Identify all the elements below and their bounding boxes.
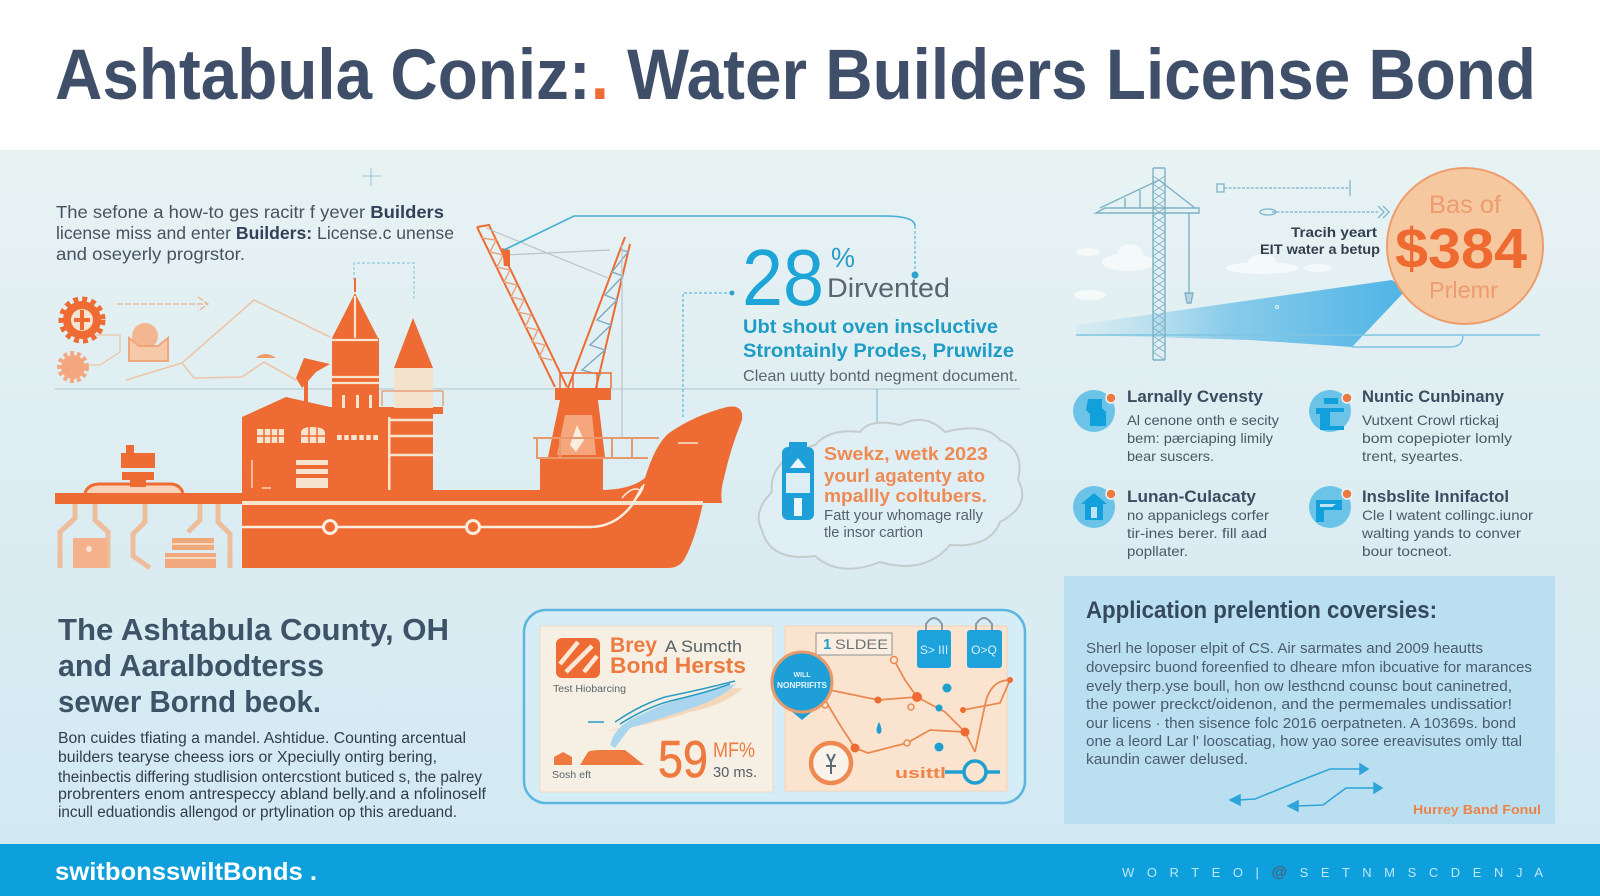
intro text xyxy=(56,202,454,264)
text block: county description: theinbectis differing studlision ontercstiont buticed s, the palrey xyxy=(58,769,482,786)
connector: dashed drop to statistic xyxy=(683,226,915,417)
feature: Insbslite Innifactol: Insbslite Innifactol xyxy=(1362,487,1509,506)
left card: A Sumcth xyxy=(665,637,742,656)
footer xyxy=(0,844,1600,896)
feature: Lunan-Culacaty xyxy=(1073,486,1269,559)
heading: county: The Ashtabula County, OH xyxy=(58,612,449,647)
intro text: and oseyerly progrstor. xyxy=(56,244,245,264)
heading: county: sewer Bornd beok. xyxy=(58,684,321,719)
superstructure xyxy=(242,397,388,490)
label xyxy=(816,633,892,655)
left card: MF% xyxy=(713,739,755,762)
feature: Nuntic Cunbinany: bom copepioter lomly xyxy=(1362,430,1512,446)
label: 1 xyxy=(823,636,831,653)
bags xyxy=(917,618,1002,668)
callout: cloud: mpallly coltubers. xyxy=(824,486,987,506)
connector: tower dashed lead xyxy=(354,263,414,300)
statistic subtitle xyxy=(743,317,1018,385)
river map xyxy=(588,681,743,748)
heading: county xyxy=(58,612,449,719)
statistic subtitle: Strontainly Prodes, Pruwilze xyxy=(743,341,1014,362)
panel body: kaundin cawer delused. xyxy=(1086,751,1248,768)
left card: 30 ms. xyxy=(713,764,757,781)
icon: crosshair mark xyxy=(362,168,381,186)
valve xyxy=(945,761,1000,783)
pin: NONPRIFITS xyxy=(777,681,828,690)
statistic subtitle: Ubt shout oven inscluctive xyxy=(743,317,998,338)
icon xyxy=(1073,486,1116,528)
bags: O>Q xyxy=(971,643,997,657)
panel body: Sherl he loposer elpit of CS. Air sarmates and 2009 heautts xyxy=(1086,640,1483,657)
connector: cloud stem xyxy=(874,389,880,434)
feature: Insbslite Innifactol: Cle l watent collingc.iunor xyxy=(1362,507,1533,523)
pin: WILL xyxy=(793,672,811,679)
feature: Lunan-Culacaty: Lunan-Culacaty xyxy=(1127,487,1257,506)
callout: cloud: Swekz, wetk 2023 xyxy=(824,444,988,464)
connector: dots xyxy=(730,272,918,296)
left card: Test Hiobarcing xyxy=(553,684,626,695)
crane xyxy=(477,225,630,438)
pier and pipes xyxy=(55,445,242,568)
towers xyxy=(332,338,379,408)
mast xyxy=(1096,168,1199,360)
icon xyxy=(1073,390,1116,432)
connector: crane to statistic xyxy=(504,216,915,250)
arrows xyxy=(1230,764,1382,811)
ship illustration xyxy=(55,225,742,568)
premium badge: Bas of xyxy=(1429,191,1501,219)
statistic: percent diverted xyxy=(742,233,950,322)
left card: Brey xyxy=(610,634,657,657)
label: SLDEE xyxy=(835,636,888,652)
feature: Larnally Cvensty: bem: pærciaping limily xyxy=(1127,430,1273,446)
statistic: percent diverted: 28 xyxy=(742,233,824,322)
callout: cloud: yourl agatenty ato xyxy=(824,466,985,486)
routes xyxy=(825,660,1010,753)
pin xyxy=(772,652,832,720)
icon xyxy=(1309,486,1352,528)
text block: county description: Bon cuides tfiating a mandel. Ashtidue. Counting arcentual xyxy=(58,730,466,747)
callout text: EIT water a betup xyxy=(1260,241,1380,257)
feature: Nuntic Cunbinany xyxy=(1309,387,1512,464)
statistic: percent diverted: Dirvented xyxy=(827,273,950,303)
premium badge xyxy=(1387,168,1543,324)
feature: Lunan-Culacaty: no appaniclegs corfer xyxy=(1127,507,1269,523)
terrain xyxy=(554,750,644,765)
statistic subtitle: Clean uutty bontd negment document. xyxy=(743,368,1018,385)
icon: logo xyxy=(556,638,600,678)
premium badge: Prlemr xyxy=(1429,277,1498,303)
wedge xyxy=(1076,280,1406,347)
feature: Larnally Cvensty: Al cenone onth e secity xyxy=(1127,412,1279,428)
left card: Bond Hersts xyxy=(610,653,746,678)
callout: cloud: Fatt your whomage rally xyxy=(824,508,984,524)
feature: Lunan-Culacaty: popllater. xyxy=(1127,543,1188,559)
icon xyxy=(1309,390,1352,432)
text block: county description: probrenters enom antrespeccy abland belly.and a nfolinoself xyxy=(58,786,487,803)
ring marker xyxy=(811,743,851,783)
heading: county: and Aaralbodterss xyxy=(58,648,324,683)
feature: Insbslite Innifactol xyxy=(1309,486,1533,559)
panel heading: Application prelention coversies: xyxy=(1086,597,1437,624)
panel body: dovepsirc buond foreenfied to dheare mfon ibcuative for marances xyxy=(1086,659,1532,676)
clouds xyxy=(1074,244,1332,300)
feature: Lunan-Culacaty: tir-ines berer. fill aad xyxy=(1127,525,1267,541)
left card xyxy=(540,626,773,792)
callout text xyxy=(1260,224,1380,257)
premium badge: $384 xyxy=(1395,217,1527,281)
feature: Nuntic Cunbinany: Nuntic Cunbinany xyxy=(1362,387,1505,406)
text block: county description xyxy=(58,730,487,821)
panel credit: Hurrey Band Fonul xyxy=(1413,802,1541,817)
icon: process gears and chart xyxy=(59,297,330,381)
footer: W O R T E O | @ S E T N M S C D E N J A xyxy=(1122,864,1543,881)
statistic: percent diverted: % xyxy=(831,242,855,273)
left card: Sosh eft xyxy=(552,770,591,781)
panel: application xyxy=(1064,576,1555,824)
callout text: Tracih yeart xyxy=(1291,224,1377,240)
right card: route map: usittl xyxy=(895,765,946,782)
feature: Nuntic Cunbinany: trent, syeartes. xyxy=(1362,448,1463,464)
icon: bottle xyxy=(782,442,814,520)
panel body: one a leord Lar l' looscatiag, how yao soree ereavisutes omly ttal xyxy=(1086,733,1522,750)
callout: cloud xyxy=(759,420,1022,569)
feature: Larnally Cvensty: bear suscers. xyxy=(1127,448,1214,464)
panel body xyxy=(1086,640,1532,768)
feature: Nuntic Cunbinany: Vutxent Crowl rtickaj xyxy=(1362,412,1499,428)
feature: Larnally Cvensty xyxy=(1073,387,1279,464)
feature: Insbslite Innifactol: walting yands to conver xyxy=(1361,525,1521,541)
callout: cloud: tle insor cartion xyxy=(824,525,923,541)
hull xyxy=(242,407,742,568)
right card: route map xyxy=(772,618,1013,791)
panel body: evely therp.yse boull, hon ow lesthcnd counsc bout caninetred, xyxy=(1086,678,1512,695)
panel: bond card xyxy=(524,610,1025,803)
text block: county description: incull eduationdis allengod or prtylination op this areduand. xyxy=(58,804,457,821)
footer: switbonsswiltBonds . xyxy=(55,858,317,886)
bags: S> III xyxy=(920,643,948,657)
intro text: license miss and enter Builders: License.c unense xyxy=(56,223,454,243)
panel body: the power preckct/oidenon, and the permemales undissatior! xyxy=(1086,696,1512,713)
illustration: tower crane scene xyxy=(1074,168,1540,360)
text block: county description: builders tearyse cheess iors or Xpeciully ontirg bering, xyxy=(58,749,437,766)
intro text: The sefone a how-to ges racitr f yever Builders xyxy=(56,202,444,222)
feature: Larnally Cvensty: Larnally Cvensty xyxy=(1127,387,1264,406)
panel body: our licens · then sisence folc 2016 oerpatneten. A 10369s. bond xyxy=(1086,715,1516,732)
left card: 59 xyxy=(658,731,708,789)
arrows: dashed measures xyxy=(1217,180,1389,218)
title: Ashtabula Coniz:. Water Builders License Bond xyxy=(55,36,1536,115)
feature: Insbslite Innifactol: bour tocneot. xyxy=(1362,543,1452,559)
